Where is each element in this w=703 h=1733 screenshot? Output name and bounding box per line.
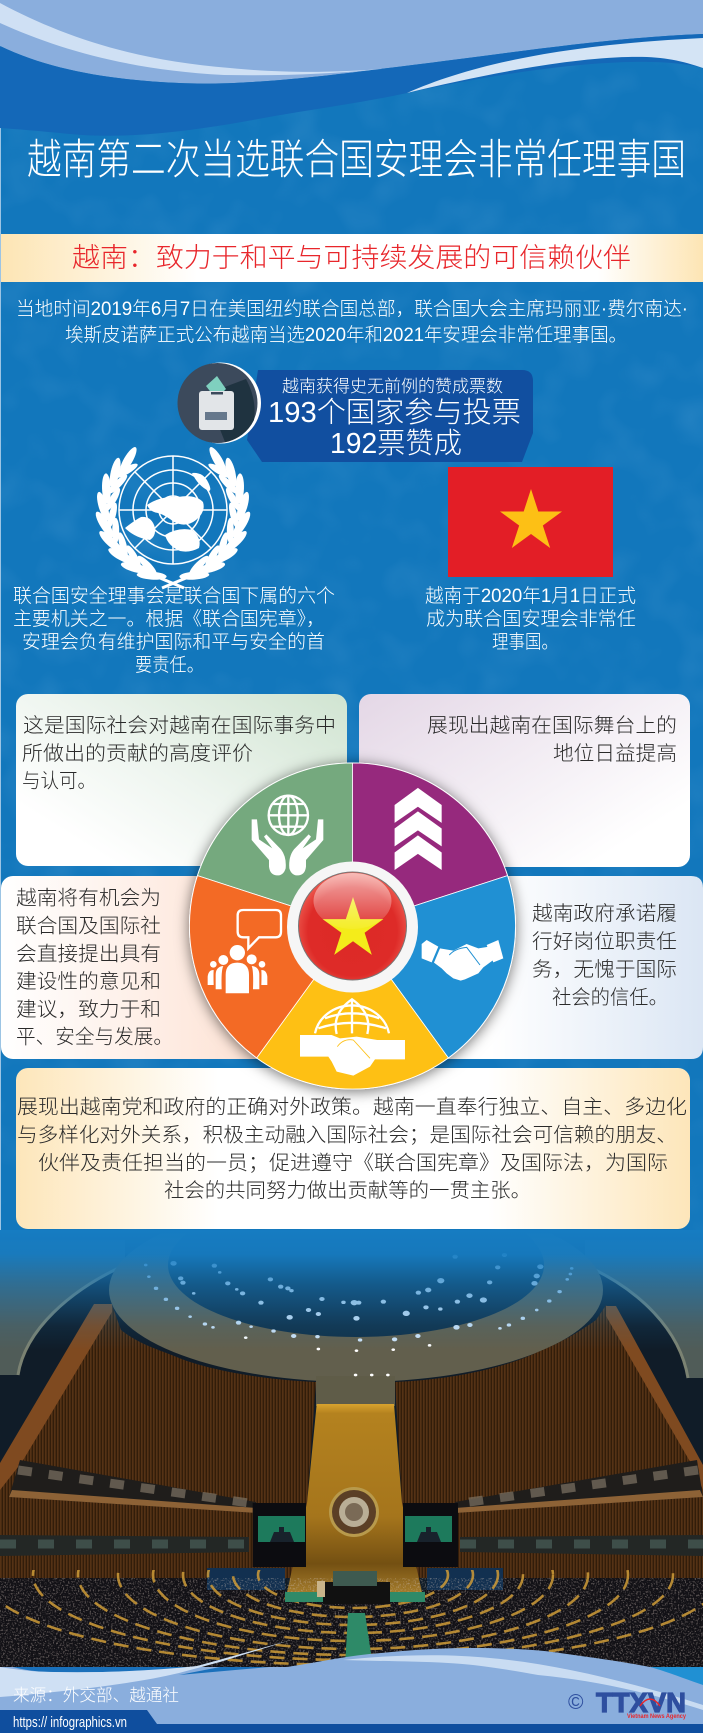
right wall [395,1305,703,1578]
intro paragraph: 埃斯皮诺萨正式公布越南当选2020年和2021年安理会非常任理事国。 [65,324,627,346]
card: rising status [359,694,690,867]
subtitle banner [1,234,703,282]
UN security council text: 要责任。 [135,654,204,676]
UN security council text: 联合国安全理事会是联合国下属的六个 [13,585,335,607]
icon: hands holding globe [252,796,323,875]
card: duty commitment: 越南政府承诺履 [532,902,677,925]
card: constructive opinions [1,876,301,1059]
left screen [253,1503,306,1567]
card: constructive opinions: 越南将有机会为 [16,886,161,910]
UN security council text: 主要机关之一。根据《联合国宪章》， [13,608,325,630]
intro paragraph [16,298,688,346]
dome [168,1258,544,1337]
votes text: 192票赞成 [330,427,462,460]
TTXVN logo: © [568,1691,584,1714]
Vietnam term text: 越南于2020年1月1日正式 [425,585,636,607]
card: rising status: 展现出越南在国际舞台上的 [427,714,677,737]
UN security council text [13,585,335,676]
Vietnam term text: 理事国。 [492,631,558,653]
card: foreign policy: 展现出越南党和政府的正确对外政策。越南一直奉行独立、自主、多边化 [17,1096,687,1118]
lower balconies [0,1535,703,1556]
card: constructive opinions: 会直接提出具有 [16,942,161,966]
ceiling lights [144,1253,574,1376]
TTXVN logo: TTXVN [596,1687,686,1718]
votes text [268,377,521,460]
icon: globe and handshake on yellow [300,999,405,1076]
UN security council text: 安理会负有维护国际和平与安全的首 [22,631,325,653]
card: duty commitment: 行好岗位职责任 [532,930,677,953]
pie wheel [189,762,516,1090]
slice: blue [352,876,515,1058]
card: constructive opinions: 建设性的意见和 [16,970,161,993]
card: constructive opinions: 平、安全与发展。 [16,1026,173,1048]
wreath [93,445,253,588]
UN seal [329,1487,379,1537]
photo: UN General Assembly hall [0,1193,703,1670]
icon: handshake on blue [422,940,503,981]
bottom wave [0,1640,703,1733]
center aisle [346,1613,371,1658]
card: duty commitment: 务，无愧于国际 [532,958,677,981]
footer tab [0,1710,703,1733]
left wall pillar [0,1304,112,1490]
top wave decoration [0,0,703,136]
gold panel [287,1404,422,1592]
card: international recognition: 这是国际社会对越南在国际事务中 [23,714,336,737]
slice: green [198,763,352,926]
Vietnam term text [425,585,636,653]
right screen [403,1503,458,1567]
left upper balcony [9,1460,256,1513]
source text: 来源：外交部、越通社 [13,1686,179,1705]
intro paragraph: 当地时间2019年6月7日在美国纽约联合国总部，联合国大会主席玛丽亚·费尔南达· [16,298,688,320]
right wall pillar [606,1306,703,1490]
TTXVN logo: Vietnam News Agency [627,1714,687,1720]
card: foreign policy: 与多样化对外关系，积极主动融入国际社会；是国际社会可信赖的朋友、 [17,1124,677,1146]
footer url: https:// infographics.vn [13,1714,127,1731]
card: international recognition: 所做出的贡献的高度评价 [22,742,253,765]
card: international recognition: 与认可。 [22,770,96,792]
votes text: 越南获得史无前例的赞成票数 [282,377,503,396]
card: foreign policy: 伙伴及责任担当的一员；促进遵守《联合国宪章》及国际法，为国际 [38,1152,668,1174]
rostrum [285,1571,425,1667]
slice: orange [190,876,352,1058]
icon: UN emblem [93,445,253,588]
votes text: 193个国家参与投票 [268,396,521,429]
card: rising status: 地位日益提高 [553,742,677,765]
slice: purple [352,763,508,926]
ceiling arches [0,1260,703,1378]
card: foreign policy [16,1068,690,1229]
ceiling [109,1258,603,1406]
icon: chevrons up [395,788,442,870]
Vietnam term text: 成为联合国安理会非常任 [426,608,636,630]
card: duty commitment: 社会的信任。 [552,986,668,1009]
icon: ballot box [178,362,261,444]
icon: people with speech bubble [208,910,281,993]
card: international recognition [16,694,347,866]
crowd [0,1570,703,1667]
card: constructive opinions: 建议，致力于和 [16,998,161,1021]
card: constructive opinions: 联合国及国际社 [16,914,161,938]
center badge [287,862,418,992]
right upper balcony [455,1460,703,1513]
icon: Vietnam flag [448,467,613,577]
top fade to blue [0,1230,703,1350]
back panels [207,1568,285,1590]
left wall [0,1305,316,1578]
slice: yellow [257,926,448,1089]
card: duty commitment [400,876,703,1059]
votes panel [178,362,533,462]
subtitle text: 越南：致力于和平与可持续发展的可信赖伙伴 [72,243,631,273]
card: foreign policy: 社会的共同努力做出贡献等的一贯主张。 [164,1179,531,1202]
